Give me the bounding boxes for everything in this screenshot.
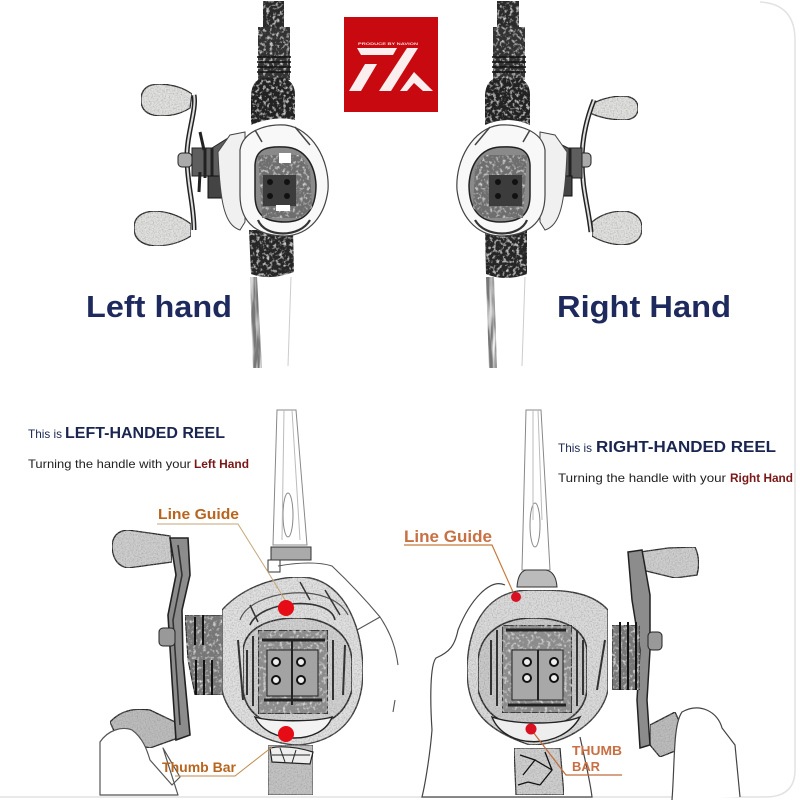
thumb bar pointer — [533, 732, 622, 775]
illustration: bottom left-handed reel in hands — [100, 410, 398, 795]
reel body — [218, 125, 328, 236]
right hand outline — [278, 563, 398, 712]
handle — [134, 84, 228, 246]
text block: left-handed reel: This is — [28, 427, 62, 441]
handle — [548, 96, 642, 245]
right thumb — [672, 708, 740, 800]
rod top section — [485, 1, 530, 125]
handle crank — [612, 547, 699, 757]
rod blank — [268, 410, 311, 572]
left hand fingers — [100, 728, 180, 795]
label: Line Guide: Line Guide — [404, 528, 492, 546]
rod lower grip — [485, 230, 527, 368]
label: THUMB BAR: BAR — [572, 759, 601, 774]
text block: right-handed reel: This is — [558, 441, 592, 455]
marker: thumb bar dot — [526, 724, 536, 734]
thumb bar pointer — [175, 747, 272, 776]
handle crank — [110, 530, 190, 748]
rod top section — [251, 1, 295, 125]
text block: left-handed reel — [28, 425, 249, 471]
line guide pointer — [157, 524, 285, 600]
left hand holding reel — [422, 584, 592, 797]
rod blank — [517, 410, 557, 587]
text block: left-handed reel: LEFT-HANDED REEL — [65, 425, 225, 442]
text block: right-handed reel — [558, 439, 793, 485]
grip — [268, 745, 313, 795]
label: THUMB BAR: THUMB — [572, 743, 622, 758]
reel body — [467, 590, 608, 745]
text block: left-handed reel: Turning the handle with your — [28, 457, 191, 471]
text block: right-handed reel: Turning the handle with your — [558, 471, 726, 485]
heading: Right Hand: Right Hand — [557, 289, 731, 324]
reel body — [222, 577, 363, 745]
marker: line guide dot — [511, 592, 521, 602]
label: THUMB BAR — [572, 743, 622, 774]
label: Thumb Bar: Thumb Bar — [162, 759, 237, 775]
marker: thumb bar dot — [278, 726, 294, 742]
line guide pointer — [404, 545, 513, 592]
heading: Left hand: Left hand — [86, 289, 232, 324]
logo: PRODUCE BY NAVION — [358, 42, 419, 46]
marker: line guide dot — [278, 600, 294, 616]
reel body — [457, 125, 567, 236]
illustration: bottom right-handed reel in hands — [404, 410, 740, 800]
illustration: top right-hand reel on rod — [457, 1, 642, 368]
text block: left-handed reel: Left Hand — [194, 457, 249, 471]
logo — [344, 17, 438, 112]
text block: right-handed reel: RIGHT-HANDED REEL — [596, 439, 776, 456]
text block: right-handed reel: Right Hand — [730, 471, 793, 485]
label: Line Guide: Line Guide — [158, 506, 239, 523]
grip — [514, 748, 564, 795]
illustration: top left-hand reel on rod — [134, 1, 328, 368]
gear housing — [185, 615, 232, 695]
rod lower grip — [249, 230, 294, 368]
